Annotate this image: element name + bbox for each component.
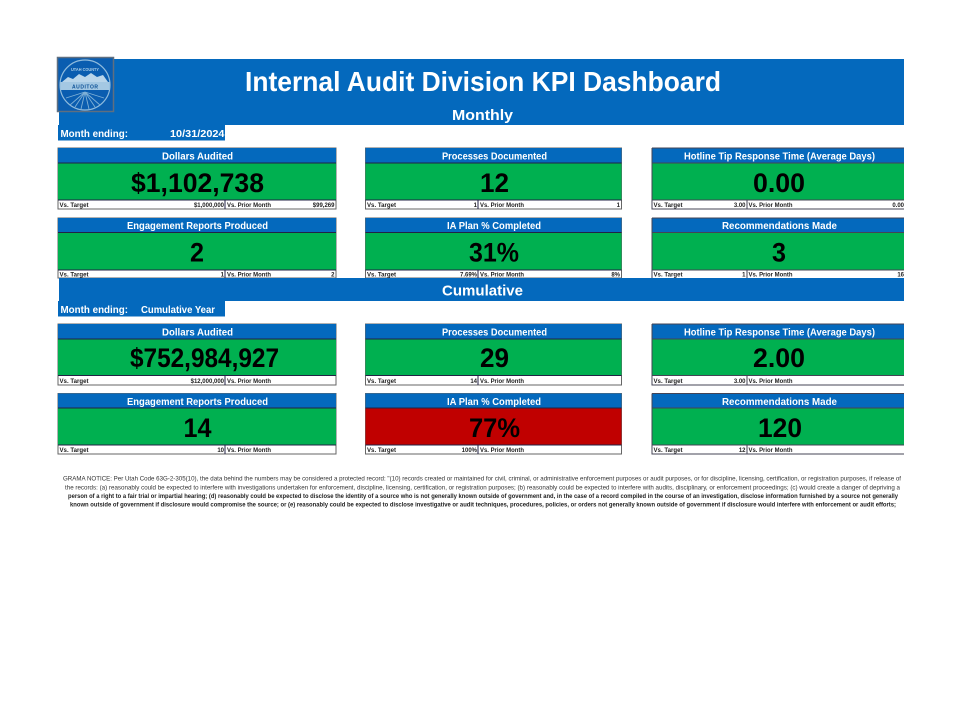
KPI card: monthly Dollars Audited: Vs. Prior Month [227, 203, 271, 209]
KPI card: cumulative IA Plan % Completed (below target): IA Plan % Completed [447, 396, 541, 408]
KPI card: cumulative Processes Documented: 29 [480, 343, 509, 373]
cumulative period label: Month ending: [60, 304, 128, 316]
KPI card: cumulative Processes Documented: Vs. Target [367, 379, 396, 385]
KPI card: monthly Engagement Reports Produced [58, 218, 336, 278]
icon: Utah County Auditor logo: AUDITOR [72, 84, 98, 90]
KPI card: cumulative Dollars Audited: $752,984,927 [130, 343, 279, 373]
KPI card: cumulative IA Plan % Completed (below target) [366, 394, 622, 454]
KPI card: monthly Engagement Reports Produced: Engagement Reports Produced [127, 220, 268, 232]
KPI card: monthly IA Plan % Completed: IA Plan % Completed [447, 220, 541, 232]
KPI card: cumulative IA Plan % Completed (below target): 77% [469, 413, 520, 443]
KPI card: monthly Processes Documented: Vs. Target [367, 203, 396, 209]
cumulative period label [58, 301, 225, 316]
cumulative period label: Cumulative Year [141, 304, 215, 316]
KPI card: cumulative IA Plan % Completed (below target): Vs. Target [367, 448, 396, 454]
KPI card: monthly Dollars Audited: Dollars Audited [162, 150, 233, 162]
KPI card: cumulative Dollars Audited: Vs. Target [60, 379, 88, 385]
KPI card: cumulative Hotline Tip Response Time: Vs. Target [654, 379, 682, 385]
KPI card: monthly Hotline Tip Response Time: 0.00 [892, 203, 905, 209]
KPI card: monthly Hotline Tip Response Time: Vs. Prior Month [748, 203, 793, 209]
KPI card: monthly Recommendations Made: 3 [772, 238, 786, 268]
KPI card: monthly Processes Documented: Vs. Prior Month [480, 203, 524, 209]
KPI card: monthly Recommendations Made: Recommendations Made [722, 220, 837, 232]
KPI card: monthly Processes Documented [366, 148, 622, 209]
KPI card: monthly Dollars Audited: $1,102,738 [131, 168, 264, 198]
KPI card: cumulative Recommendations Made [652, 394, 904, 454]
KPI card: cumulative Engagement Reports Produced: Vs. Target [60, 448, 88, 454]
KPI card: cumulative Dollars Audited: $12,000,000 [191, 379, 225, 385]
KPI card: monthly IA Plan % Completed: Vs. Target [367, 272, 396, 278]
title banner [59, 59, 904, 125]
monthly period label: Month ending: [60, 128, 128, 140]
KPI card: monthly Recommendations Made [652, 218, 905, 278]
KPI card: monthly Hotline Tip Response Time: Vs. Target [654, 203, 682, 209]
KPI card: cumulative Recommendations Made: 12 [739, 448, 746, 454]
KPI card: cumulative Engagement Reports Produced: Vs. Prior Month [227, 448, 271, 454]
KPI card: cumulative Processes Documented: Vs. Prior Month [480, 379, 524, 385]
KPI card: monthly Recommendations Made: 16 [897, 272, 905, 278]
KPI card: monthly IA Plan % Completed: Vs. Prior Month [480, 272, 524, 278]
GRAMA notice text block: known outside of government if disclosure would compromise the source; or (e) reasonably could be expected to disclose investigative or audit techniques, procedures, policies, or orders not generally known outside of government if disclosure would interfere with enforcement or audit efforts; [70, 502, 896, 508]
KPI card: monthly Recommendations Made: Vs. Target [654, 272, 682, 278]
title banner: Monthly [452, 107, 514, 124]
KPI card: cumulative Hotline Tip Response Time: Hotline Tip Response Time (Average Days) [684, 326, 875, 338]
KPI card: monthly Processes Documented: 12 [480, 168, 509, 198]
KPI card: cumulative Dollars Audited [58, 324, 336, 385]
GRAMA notice text block: GRAMA NOTICE: Per Utah Code 63G-2-305(10), the data behind the numbers may be considered a protected record: "(10) records created or maintained for civil, criminal, or administrative enforcement purposes or audit purposes, or for discipline, licensing, certification, or registration purposes, if release of [63, 476, 901, 482]
KPI card: monthly Processes Documented: Processes Documented [442, 150, 547, 162]
GRAMA notice text block [63, 476, 901, 508]
KPI card: monthly IA Plan % Completed [366, 218, 622, 278]
KPI card: monthly Recommendations Made: 1 [742, 272, 746, 278]
KPI card: monthly Dollars Audited: $99,269 [313, 203, 335, 209]
KPI card: monthly Engagement Reports Produced: Vs. Prior Month [227, 272, 271, 278]
KPI card: cumulative IA Plan % Completed (below target): Vs. Prior Month [480, 448, 524, 454]
KPI card: cumulative Processes Documented: Processes Documented [442, 326, 547, 338]
GRAMA notice text block: person of a right to a fair trial or impartial hearing; (d) reasonably could be expected to disclose the identity of a source who is not generally known outside of government and, in the case of a record compiled in the course of an investigation, disclose information furnished by a source not generally [68, 494, 899, 500]
monthly period label: 10/31/2024 [170, 128, 225, 140]
KPI card: monthly Dollars Audited [58, 148, 336, 209]
KPI card: cumulative Processes Documented: 14 [470, 379, 478, 385]
KPI card: cumulative Engagement Reports Produced [58, 394, 336, 454]
KPI card: cumulative Recommendations Made: Vs. Prior Month [748, 448, 793, 454]
KPI card: monthly Engagement Reports Produced: 2 [331, 272, 335, 278]
KPI card: cumulative Engagement Reports Produced: 10 [217, 448, 225, 454]
KPI card: cumulative Hotline Tip Response Time: 2.00 [753, 343, 805, 373]
KPI card: monthly Engagement Reports Produced: 2 [190, 238, 204, 268]
icon: Utah County Auditor logo [58, 58, 114, 112]
KPI card: cumulative Hotline Tip Response Time: Vs. Prior Month [748, 379, 793, 385]
KPI card: monthly IA Plan % Completed: 7.69% [460, 272, 478, 278]
KPI card: cumulative Engagement Reports Produced: 14 [184, 413, 212, 443]
KPI card: cumulative Engagement Reports Produced: Engagement Reports Produced [127, 396, 268, 408]
KPI card: cumulative Recommendations Made: Vs. Target [654, 448, 682, 454]
Cumulative section banner [59, 278, 904, 301]
KPI card: monthly Recommendations Made: Vs. Prior Month [748, 272, 793, 278]
KPI card: monthly Hotline Tip Response Time: 3.00 [734, 203, 746, 209]
monthly period label [58, 125, 225, 140]
KPI card: cumulative Processes Documented [366, 324, 622, 385]
KPI card: cumulative IA Plan % Completed (below target): 100% [462, 448, 478, 454]
GRAMA notice text block: the records: (a) reasonably could be expected to interfere with investigations undertaken for enforcement, discipline, licensing, certification, or registration purposes; (b) reasonably could be expected to interfere with audits, disciplinary, or enforcement proceedings; (c) would create a danger of depriving a [65, 486, 901, 492]
KPI card: cumulative Dollars Audited: Vs. Prior Month [227, 379, 271, 385]
icon: Utah County Auditor logo: UTAH COUNTY [71, 67, 99, 72]
KPI card: monthly Engagement Reports Produced: Vs. Target [60, 272, 88, 278]
title banner: Internal Audit Division KPI Dashboard [245, 66, 721, 97]
KPI card: cumulative Dollars Audited: Dollars Audited [162, 326, 233, 338]
KPI card: monthly Hotline Tip Response Time: 0.00 [753, 168, 805, 198]
KPI card: monthly Dollars Audited: Vs. Target [60, 203, 88, 209]
KPI card: cumulative Recommendations Made: Recommendations Made [722, 396, 837, 408]
KPI card: monthly IA Plan % Completed: 8% [611, 272, 621, 278]
KPI card: cumulative Hotline Tip Response Time: 3.00 [734, 379, 746, 385]
KPI card: monthly Processes Documented: 1 [617, 203, 621, 209]
KPI card: monthly Engagement Reports Produced: 1 [221, 272, 225, 278]
KPI card: monthly IA Plan % Completed: 31% [469, 238, 519, 268]
Cumulative section banner: Cumulative [442, 282, 523, 300]
KPI card: monthly Dollars Audited: $1,000,000 [194, 203, 225, 209]
KPI card: monthly Processes Documented: 1 [474, 203, 478, 209]
KPI card: monthly Hotline Tip Response Time [652, 148, 905, 209]
KPI card: monthly Hotline Tip Response Time: Hotline Tip Response Time (Average Days) [684, 150, 875, 162]
KPI card: cumulative Recommendations Made: 120 [758, 413, 802, 443]
KPI card: cumulative Hotline Tip Response Time [652, 324, 904, 385]
